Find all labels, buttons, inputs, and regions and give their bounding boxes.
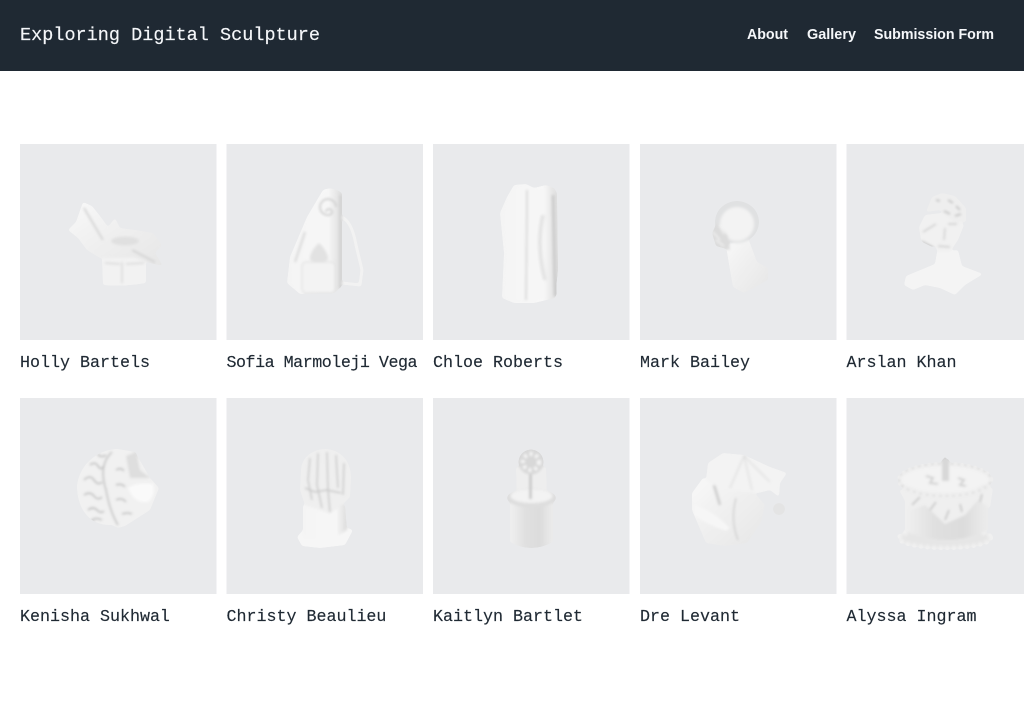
artist name: Kaitlyn Bartlet <box>433 608 583 627</box>
navigation links <box>747 26 994 43</box>
sculpture: textured head on plinth <box>297 449 353 548</box>
gallery card: Christy Beaulieu <box>226 398 423 627</box>
artist name: Christy Beaulieu <box>226 608 386 627</box>
navigation links: Submission Form <box>874 26 994 43</box>
gallery card: Holly Bartels <box>20 144 216 373</box>
gallery card: Arslan Khan <box>846 144 1024 373</box>
artist name: Holly Bartels <box>20 354 150 373</box>
gallery card: Chloe Roberts <box>433 144 630 373</box>
artist name: Arslan Khan <box>846 354 956 373</box>
sculpture: bust in profile <box>712 201 768 293</box>
artist name: Chloe Roberts <box>433 354 563 373</box>
artist name: Mark Bailey <box>640 354 750 373</box>
sculpture: brain with shell <box>77 449 159 528</box>
gallery card: Mark Bailey <box>640 144 836 373</box>
sculpture: figure beneath a draped canopy <box>692 453 787 546</box>
artist name: Sofia Marmoleji Vega <box>226 354 418 373</box>
site title: Exploring Digital Sculpture <box>20 25 320 46</box>
artist name: Dre Levant <box>640 608 740 627</box>
sculpture: decorated layer cake <box>899 455 993 548</box>
gallery card: Alyssa Ingram <box>846 398 1024 627</box>
gallery card: Dre Levant <box>640 398 836 627</box>
gallery card: Sofia Marmoleji Vega <box>226 144 423 373</box>
gallery card: Kaitlyn Bartlet <box>433 398 630 627</box>
artist name: Kenisha Sukhwal <box>20 608 170 627</box>
artist name: Alyssa Ingram <box>846 608 976 627</box>
gallery card: Kenisha Sukhwal <box>20 398 216 627</box>
sculpture: open box with flared top <box>68 202 163 286</box>
navigation links: About <box>747 26 788 43</box>
sculpture: male bust with curly hair <box>904 193 983 295</box>
header bar <box>0 0 1024 71</box>
sculpture: folded block <box>500 184 558 303</box>
navigation links: Gallery <box>807 26 857 43</box>
sculpture: flower in cylinder pot <box>507 450 556 548</box>
sculpture: backpack <box>287 189 362 294</box>
